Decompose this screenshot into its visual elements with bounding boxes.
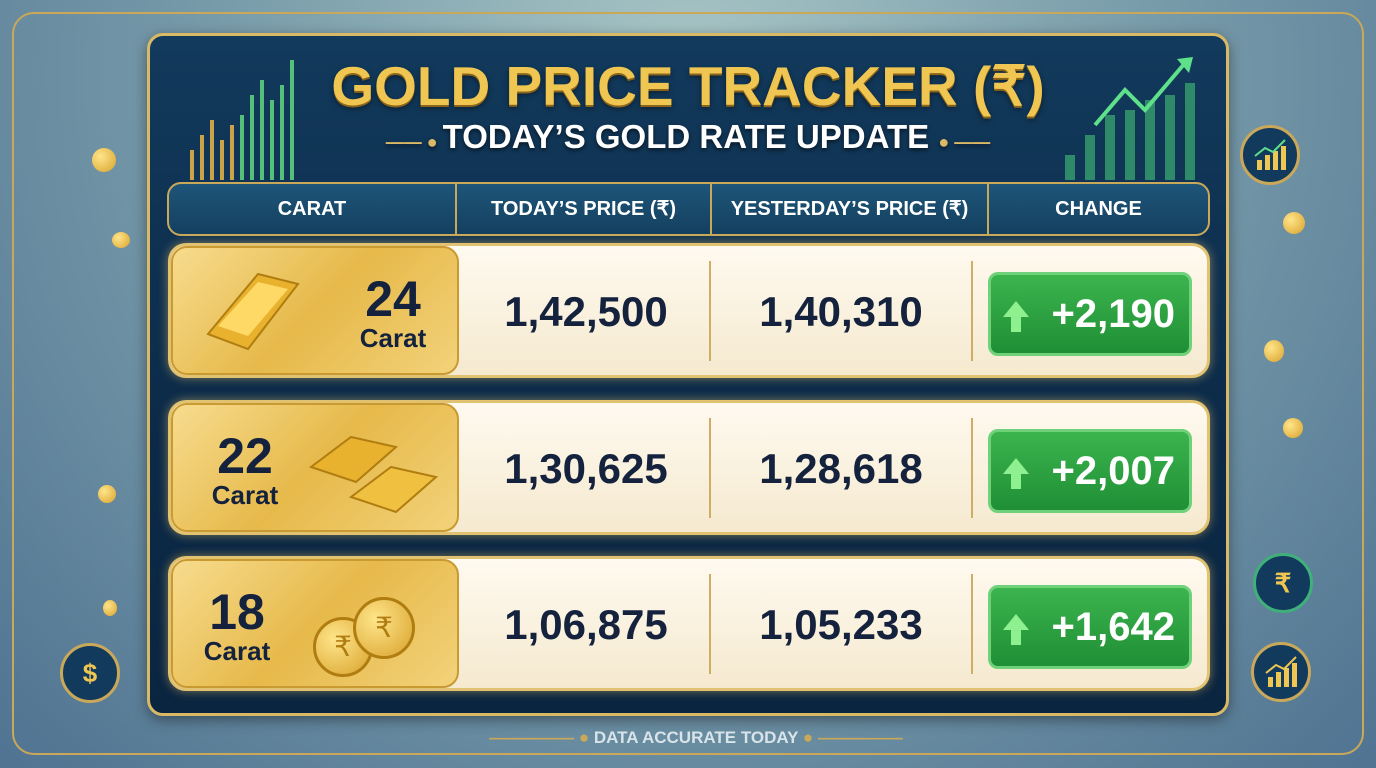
icon: chart circle bottom right — [1251, 642, 1311, 702]
row: 24 carat — [168, 243, 1210, 378]
row: 24 carat: Carat — [360, 323, 426, 353]
icon: rupee coins: ₹ — [334, 631, 352, 662]
icon: rupee coins: ₹ — [375, 612, 393, 643]
chart right decoration — [1065, 57, 1195, 180]
table header: CARAT — [278, 198, 346, 220]
row: 24 carat: 24 — [365, 271, 421, 327]
row: 18 carat — [168, 556, 1210, 691]
chart left decoration — [190, 60, 294, 180]
table header: TODAY’S PRICE (₹) — [491, 198, 676, 220]
table header: CHANGE — [1055, 198, 1142, 220]
icon: rupee circle — [1253, 553, 1313, 613]
row: 18 carat: 1,06,875 — [504, 601, 668, 648]
footer: ————— ● DATA ACCURATE TODAY ● ————— — [489, 728, 903, 747]
icon: chart circle top right — [1240, 125, 1300, 185]
badge: change: +2,007 — [1052, 449, 1175, 493]
icon: rupee circle: ₹ — [1275, 568, 1291, 598]
icon: gold bars — [309, 436, 438, 514]
row: 18 carat: Carat — [204, 636, 270, 666]
row: 24 carat: 1,42,500 — [504, 288, 668, 335]
main panel — [147, 33, 1229, 716]
row: 22 carat: 1,30,625 — [504, 445, 668, 492]
row: 22 carat: 1,28,618 — [759, 445, 923, 492]
badge: change — [988, 272, 1192, 356]
icon: rupee coins — [313, 597, 415, 677]
badge: change: +2,190 — [1052, 292, 1175, 336]
row: 18 carat: 1,05,233 — [759, 601, 923, 648]
table header — [167, 182, 1210, 236]
icon: gold bar — [206, 272, 300, 350]
row: 22 carat — [168, 400, 1210, 535]
row: 22 carat: Carat — [212, 480, 278, 510]
row: 18 carat: 18 — [209, 584, 265, 640]
row: 22 carat: 22 — [217, 428, 273, 484]
subtitle: —— ● TODAY’S GOLD RATE UPDATE ● —— — [386, 118, 990, 155]
badge: change — [988, 429, 1192, 513]
icon: money bag — [60, 643, 120, 703]
table header: YESTERDAY’S PRICE (₹) — [731, 198, 968, 220]
badge: change: +1,642 — [1052, 605, 1175, 649]
row: 24 carat: 1,40,310 — [759, 288, 923, 335]
title: GOLD PRICE TRACKER (₹) — [331, 55, 1045, 117]
icon: money bag: $ — [83, 658, 97, 688]
badge: change — [988, 585, 1192, 669]
